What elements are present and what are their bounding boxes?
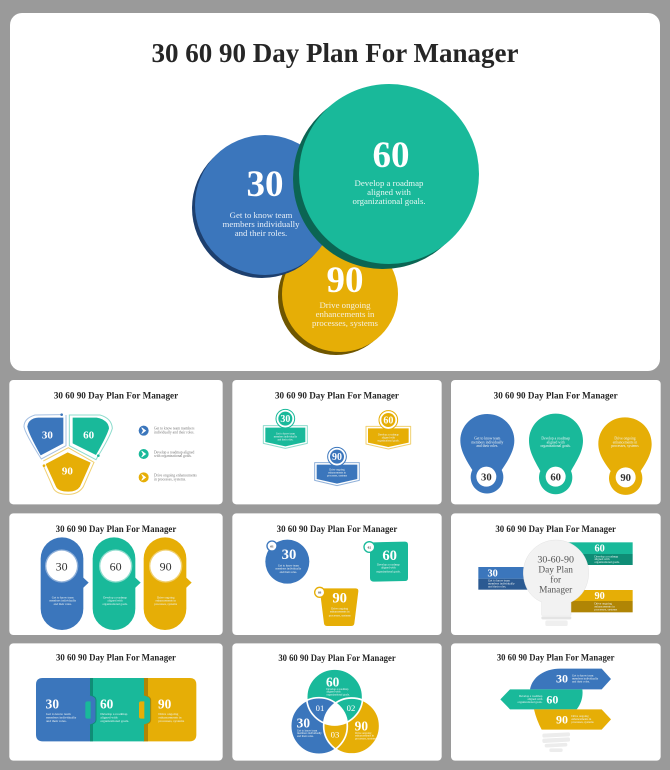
band 60: 60 bbox=[595, 544, 605, 555]
segment 30 bbox=[24, 413, 66, 459]
band 60: aligned with bbox=[594, 557, 610, 561]
band 60: Develop a roadmap bbox=[594, 554, 619, 558]
trapezoid card 90: enhancements in bbox=[330, 610, 350, 614]
square card 60: organizational goals. bbox=[376, 569, 401, 573]
light bulb: Day Plan bbox=[538, 566, 573, 576]
square card 60: 02 bbox=[368, 545, 371, 549]
capsule 60: Develop a roadmap bbox=[103, 595, 127, 599]
square card 60: 60 bbox=[382, 548, 397, 564]
arrow 90: enhancements in bbox=[571, 717, 592, 721]
slide title: 30 60 90 Day Plan For Manager bbox=[56, 652, 177, 663]
circle: 60: organizational goals. bbox=[352, 196, 426, 206]
venn diagram: Drive ongoing bbox=[355, 731, 372, 735]
circle: 60 bbox=[293, 84, 479, 269]
circle: 30: members individually bbox=[223, 219, 300, 229]
list item 1: Get to know team members bbox=[154, 427, 195, 431]
venn diagram: enhancements in bbox=[355, 734, 375, 738]
list item 1 bbox=[139, 426, 195, 436]
band 30: and their roles. bbox=[488, 585, 506, 589]
band 60 bbox=[568, 542, 633, 565]
circle: 60: aligned with bbox=[367, 187, 411, 197]
capsule 60: 60 bbox=[110, 559, 122, 573]
badge 60: aligned with bbox=[382, 436, 396, 439]
teardrop 30: members individually bbox=[471, 440, 503, 444]
panel: three-circle venn slide bbox=[232, 643, 442, 761]
list item 2: Develop a roadmap aligned bbox=[154, 450, 194, 454]
capsule 90: processes, systems bbox=[154, 602, 178, 607]
puzzle piece 90: enhancements in bbox=[158, 715, 182, 719]
venn diagram: members individually bbox=[297, 731, 322, 735]
slide title: 30 60 90 Day Plan For Manager bbox=[275, 391, 400, 402]
teardrop 30 bbox=[460, 414, 514, 494]
capsule 30: members individually bbox=[49, 599, 76, 603]
circle: 30: 30 bbox=[246, 164, 284, 205]
arrow 30: 30 bbox=[556, 672, 568, 686]
venn diagram: 01 bbox=[316, 703, 324, 713]
arrow 30: and their roles. bbox=[572, 679, 590, 683]
arrow 90: 90 bbox=[556, 712, 568, 726]
trapezoid card 90: 03 bbox=[318, 591, 322, 595]
trapezoid card 90 bbox=[315, 587, 358, 626]
puzzle piece 90: processes, systems bbox=[158, 719, 185, 724]
capsule 90: Drive ongoing bbox=[157, 595, 175, 599]
teardrop 60: Develop a roadmap bbox=[541, 437, 570, 441]
circle card 30: Get to know team bbox=[278, 563, 299, 567]
panel: badge slide bbox=[232, 380, 442, 504]
puzzle piece 60: 60 bbox=[100, 697, 114, 712]
slide title: 30 60 90 Day Plan For Manager bbox=[277, 524, 398, 535]
panel: light bulb slide bbox=[451, 513, 661, 635]
capsule 30: and their roles. bbox=[54, 602, 72, 606]
circle: 60: 60 bbox=[372, 135, 410, 176]
teardrop 90: enhancements in bbox=[613, 440, 637, 444]
capsule 90: enhancements in bbox=[155, 599, 176, 603]
venn diagram: 03 bbox=[331, 730, 339, 740]
badge 30: members individually bbox=[274, 435, 298, 438]
venn diagram: processes, systems bbox=[355, 736, 376, 740]
teardrop 30: 30 bbox=[481, 472, 492, 483]
circle: 90 bbox=[278, 236, 398, 355]
circle card 30: 01 bbox=[270, 544, 274, 548]
panel: capsule slide bbox=[9, 513, 223, 635]
capsule 90: 90 bbox=[160, 559, 172, 573]
badge 60: 60 bbox=[383, 415, 393, 426]
puzzle piece 30 bbox=[36, 678, 96, 741]
puzzle piece 60: Develop a roadmap bbox=[100, 712, 128, 716]
teardrop 30: Get to know team bbox=[474, 437, 501, 441]
capsule 90 bbox=[144, 537, 192, 630]
arrow 60: organizational goals. bbox=[518, 700, 543, 704]
band 30 bbox=[478, 567, 528, 590]
light bulb: for bbox=[550, 574, 562, 585]
segment 60: 60 bbox=[83, 430, 95, 442]
panel: segmented shield slide bbox=[9, 380, 223, 504]
venn diagram: 30 bbox=[297, 716, 310, 731]
badge 60: organizational goals. bbox=[377, 439, 400, 442]
teardrop 90 bbox=[598, 417, 652, 495]
arrow 90: processes, systems bbox=[571, 720, 595, 725]
teardrop 90: processes, systems bbox=[611, 444, 639, 449]
trapezoid card 90: processes, systems bbox=[329, 613, 351, 618]
puzzle piece 30: members individually bbox=[46, 715, 76, 719]
badge 90: 90 bbox=[332, 452, 342, 463]
arrow 60: Develop a roadmap bbox=[519, 694, 543, 698]
list item 3: in processes, systems. bbox=[154, 477, 186, 482]
venn diagram: 02 bbox=[347, 703, 355, 713]
circle card 30 bbox=[265, 540, 309, 584]
circle card 30: and their roles. bbox=[280, 570, 297, 574]
puzzle piece 90: Drive ongoing bbox=[158, 712, 179, 716]
square card 60: Develop a roadmap bbox=[377, 562, 400, 566]
venn diagram: aligned with bbox=[326, 690, 341, 694]
band 30: members individually bbox=[488, 582, 515, 586]
slide title: 30 60 90 Day Plan For Manager bbox=[494, 391, 618, 402]
list item 3: Drive ongoing enhancements bbox=[154, 474, 197, 478]
puzzle piece 60 bbox=[90, 678, 151, 741]
arrow 60 bbox=[500, 689, 583, 709]
band 90: processes, systems bbox=[594, 608, 618, 613]
badge 30: and their roles. bbox=[277, 438, 294, 441]
capsule 60: organizational goals. bbox=[102, 602, 128, 606]
badge 30 bbox=[263, 409, 307, 448]
light bulb bbox=[523, 540, 589, 626]
slide title: 30 60 90 Day Plan For Manager bbox=[497, 652, 615, 663]
puzzle piece 60: organizational goals. bbox=[100, 719, 129, 723]
slide title: 30 60 90 Day Plan For Manager bbox=[495, 524, 617, 535]
list item 1: individually and their roles. bbox=[154, 430, 194, 434]
list item 3 bbox=[139, 472, 197, 482]
capsule 60: aligned with bbox=[107, 599, 123, 603]
badge 30: Get to know team bbox=[276, 432, 296, 435]
slide title: 30 60 90 Day Plan For Manager bbox=[56, 524, 177, 535]
trapezoid card 90: Drive ongoing bbox=[331, 606, 349, 610]
band 30: Get to know team bbox=[488, 579, 510, 583]
arrow 30: Get to know team bbox=[572, 673, 594, 677]
puzzle piece 60: aligned with bbox=[100, 715, 118, 719]
square card 60: aligned with bbox=[381, 566, 396, 570]
band 60: organizational goals. bbox=[594, 560, 620, 564]
arrow 30 bbox=[530, 669, 611, 689]
circle: 90: 90 bbox=[326, 260, 364, 301]
teardrop 60: 60 bbox=[550, 472, 561, 483]
trapezoid card 90: 90 bbox=[332, 590, 347, 606]
circle: 30: and their roles. bbox=[235, 228, 287, 238]
segment 90 bbox=[43, 448, 94, 494]
teardrop 60 bbox=[529, 414, 583, 494]
badge 60: Develop a roadmap bbox=[378, 433, 399, 436]
venn diagram: Develop a roadmap bbox=[326, 687, 349, 691]
panel: mixed shapes slide bbox=[232, 513, 442, 635]
arrow 30: members individually bbox=[572, 676, 599, 680]
slide title: 30 60 90 Day Plan For Manager bbox=[278, 653, 396, 664]
badge 60 bbox=[366, 411, 411, 449]
venn diagram: organizational goals. bbox=[326, 692, 350, 696]
venn diagram: 90 bbox=[355, 718, 368, 733]
light bulb: 30-60-90 bbox=[537, 556, 574, 566]
puzzle piece 30: 30 bbox=[46, 697, 59, 712]
capsule 30: Get to know team bbox=[52, 595, 74, 599]
title: 30 60 90 Day Plan For Manager bbox=[152, 37, 518, 68]
badge 30: 30 bbox=[280, 414, 290, 425]
teardrop 90: 90 bbox=[620, 473, 631, 484]
circle: 30: Get to know team bbox=[230, 210, 293, 220]
venn diagram: Get to know team bbox=[297, 728, 318, 732]
venn diagram: 60 bbox=[326, 674, 340, 689]
circle: 60: Develop a roadmap bbox=[355, 178, 424, 188]
list item 2: with organizational goals. bbox=[154, 454, 192, 458]
light bulb: Manager bbox=[539, 585, 573, 595]
capsule 30: 30 bbox=[56, 559, 68, 573]
puzzle piece 30: Get to know team bbox=[46, 712, 71, 716]
circle: 90: Drive ongoing bbox=[319, 300, 371, 310]
puzzle piece 30: and their roles. bbox=[46, 719, 67, 723]
band 30: 30 bbox=[488, 568, 498, 579]
capsule 60 bbox=[93, 537, 141, 630]
band 90: enhancements in bbox=[594, 605, 615, 609]
arrow 60: 60 bbox=[546, 692, 558, 706]
list item 2 bbox=[139, 449, 194, 459]
segment 30: 30 bbox=[42, 430, 53, 442]
band 90: 90 bbox=[595, 591, 605, 602]
circle card 30: 30 bbox=[282, 547, 296, 563]
arrow 90 bbox=[534, 709, 611, 730]
circle: 30 bbox=[192, 135, 335, 278]
segment 90: 90 bbox=[62, 466, 73, 478]
slide title: 30 60 90 Day Plan For Manager bbox=[54, 391, 179, 402]
teardrop 60: organizational goals. bbox=[540, 444, 571, 448]
circle: 90: enhancements in bbox=[316, 309, 375, 319]
capsule 30 bbox=[41, 537, 89, 630]
circle card 30: members individually bbox=[276, 567, 302, 571]
panel: teardrop slide bbox=[451, 380, 661, 504]
puzzle piece 90: 90 bbox=[158, 697, 172, 712]
square card 60 bbox=[364, 542, 408, 582]
circle: 90: processes, systems bbox=[312, 318, 379, 328]
venn diagram bbox=[291, 669, 380, 754]
badge 90 bbox=[315, 447, 359, 486]
badge 90: Drive ongoing bbox=[329, 468, 345, 471]
teardrop 30: and their roles. bbox=[476, 444, 498, 448]
panel: puzzle slide bbox=[9, 643, 223, 761]
badge 90: enhancements in bbox=[328, 471, 347, 474]
arrow 60: aligned with bbox=[527, 697, 543, 701]
badge 90: processes, systems bbox=[327, 474, 347, 477]
puzzle piece 90 bbox=[143, 678, 196, 741]
band 90: Drive ongoing bbox=[594, 602, 612, 606]
teardrop 60: aligned with bbox=[547, 440, 565, 444]
segment 60 bbox=[69, 415, 112, 460]
panel: main venn slide bbox=[10, 13, 660, 371]
panel: arrow bulb slide bbox=[451, 643, 661, 761]
venn diagram: and their roles. bbox=[297, 734, 314, 738]
teardrop 90: Drive ongoing bbox=[614, 437, 636, 441]
arrow 90: Drive ongoing bbox=[571, 714, 589, 718]
bulb base bbox=[542, 732, 570, 752]
band 90 bbox=[571, 590, 633, 613]
